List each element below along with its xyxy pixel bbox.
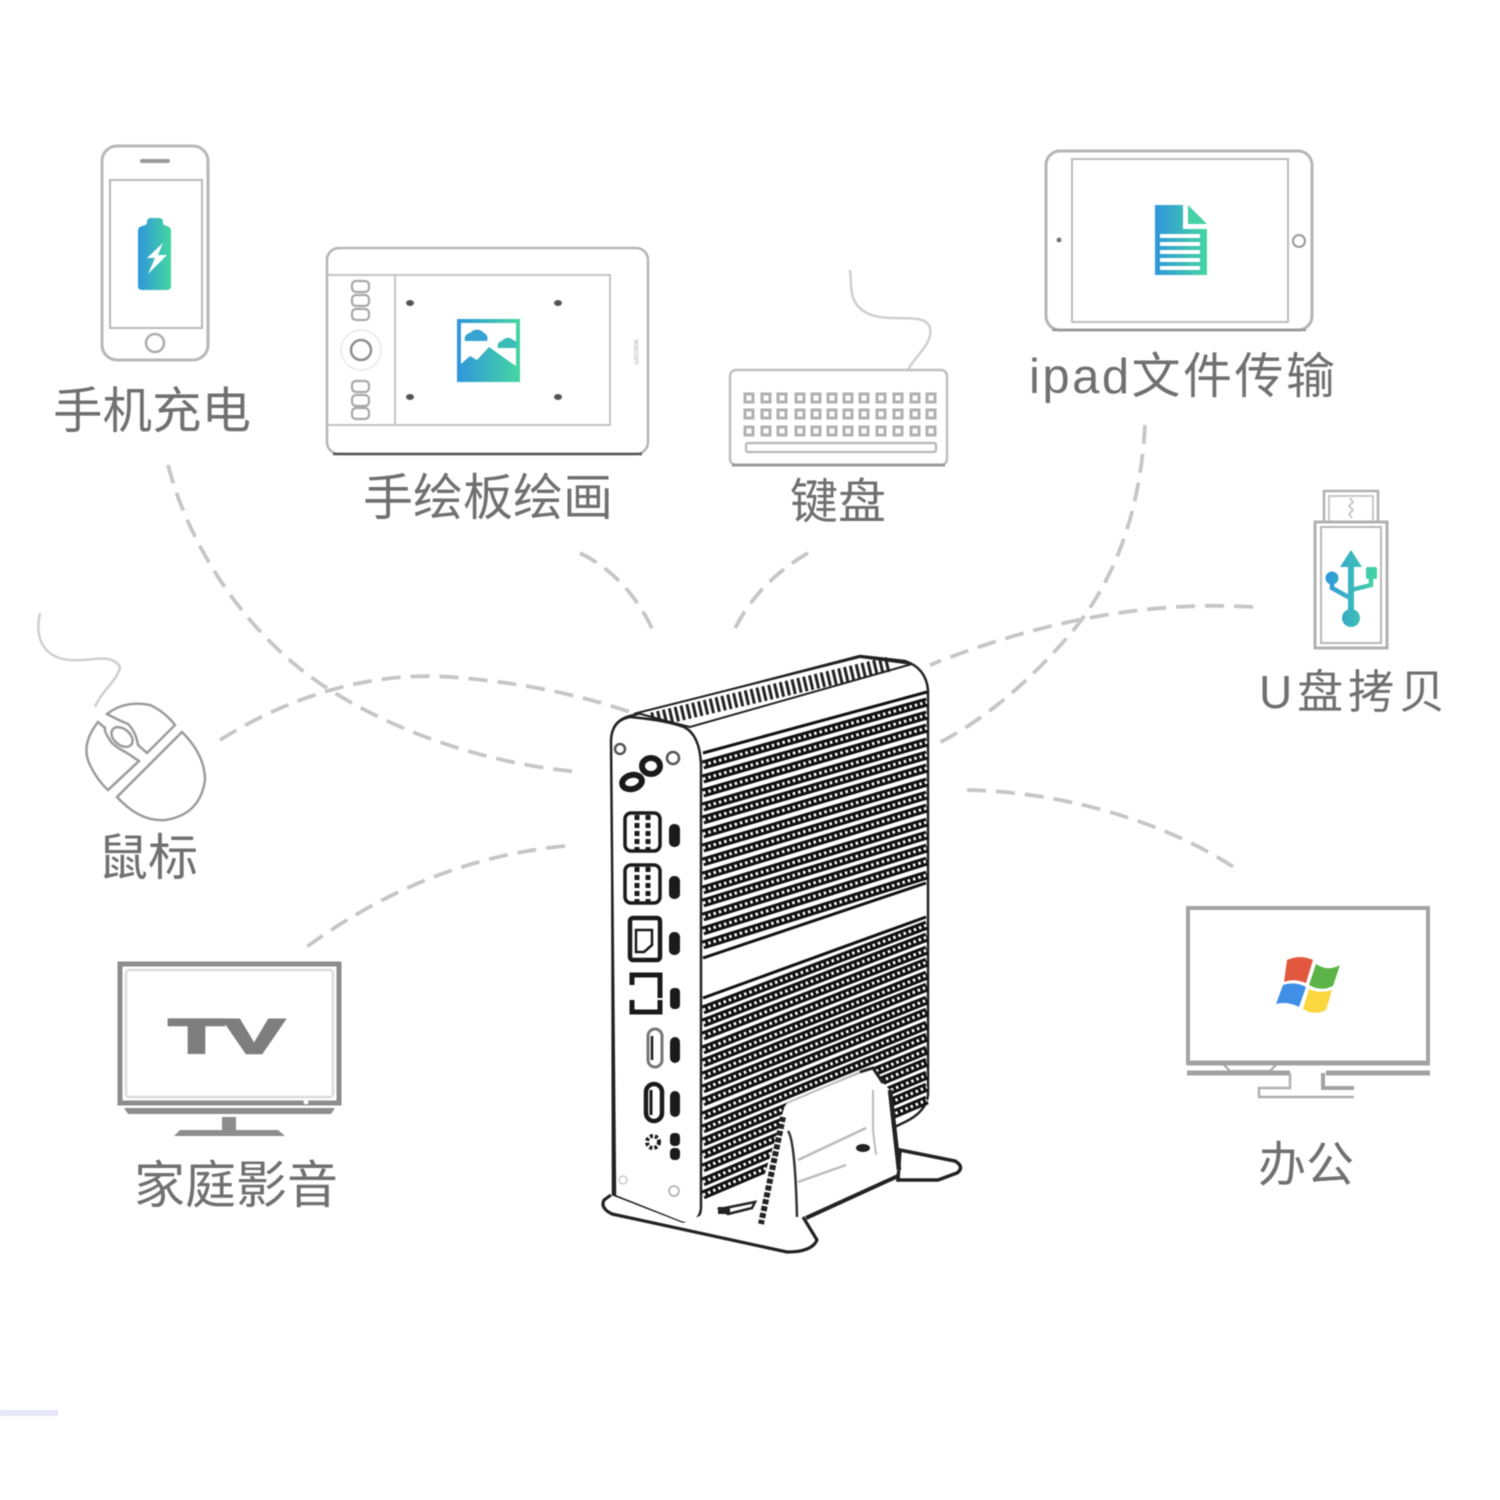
label: mouse: 鼠标 — [98, 830, 198, 886]
lower heat-sink fins — [703, 925, 927, 1195]
icon: mouse — [38, 613, 205, 820]
icon: TV: TV — [169, 1011, 284, 1064]
rear panel ports — [615, 744, 679, 1196]
icon: smartphone with battery — [102, 146, 208, 360]
icon: iPad with document — [1046, 151, 1312, 330]
stand — [603, 1068, 961, 1252]
label: drawing tablet: 手绘板绘画 — [363, 470, 613, 526]
label: USB copy: U盘拷贝 — [1259, 666, 1445, 718]
label: iPad file transfer: ipad文件传输 — [1029, 350, 1335, 404]
icon: USB drive — [1315, 491, 1387, 648]
label: phone charging: 手机充电 — [53, 384, 251, 439]
label: office: 办公 — [1258, 1139, 1354, 1192]
icon: TV — [120, 964, 339, 1136]
icon: keyboard — [730, 270, 947, 465]
main illustration: fanless mini PC — [603, 656, 961, 1252]
upper heat-sink fins — [703, 692, 927, 998]
top vents — [637, 657, 912, 727]
rear panel — [611, 717, 701, 1223]
dashed connection curves — [168, 425, 1253, 948]
label: keyboard: 键盘 — [790, 476, 886, 529]
icon: monitor with Windows logo — [1187, 908, 1430, 1097]
label: home theatre: 家庭影音 — [134, 1157, 338, 1214]
decorative lavender strip — [0, 1410, 58, 1416]
icon: drawing tablet: wacom — [632, 338, 641, 365]
status LEDs — [669, 824, 680, 1160]
icon: drawing tablet — [327, 248, 648, 454]
chassis body — [612, 656, 928, 1223]
